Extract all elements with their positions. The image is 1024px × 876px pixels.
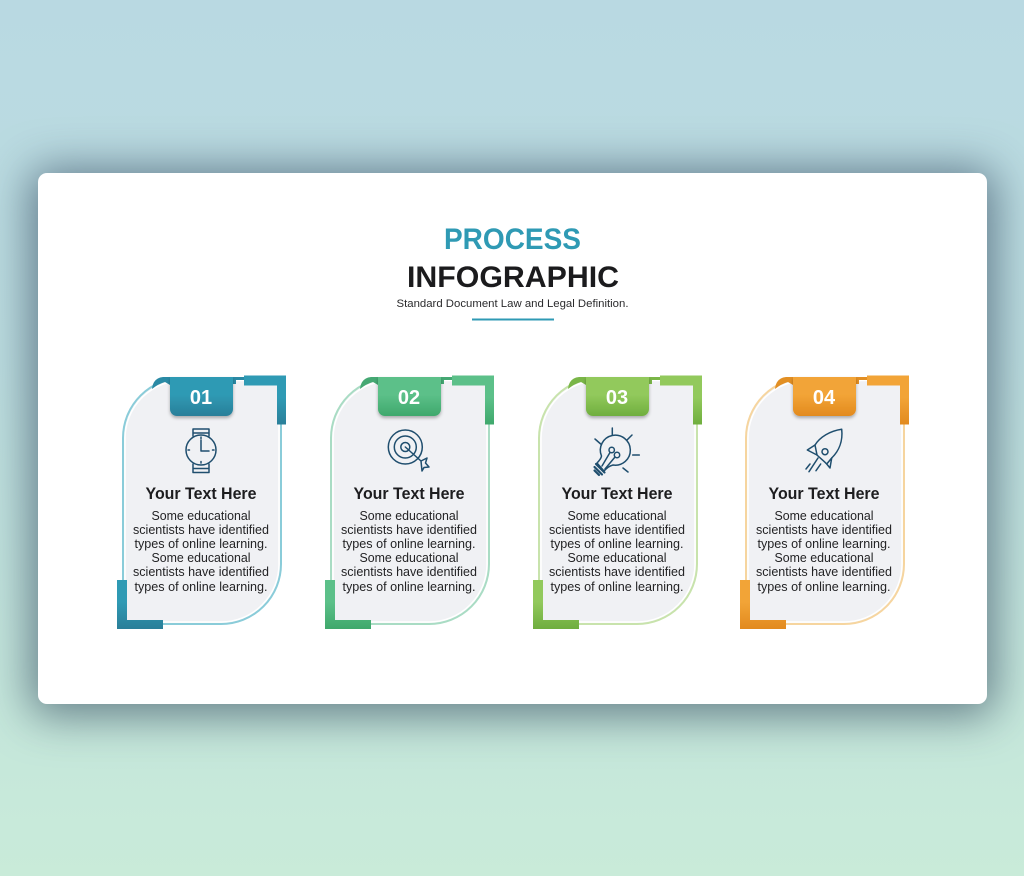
heading: Your Text Here (354, 484, 464, 503)
body text (549, 508, 685, 594)
heading: Your Text Here (146, 484, 256, 503)
body text: types of online learning. (342, 536, 476, 551)
corner: top right (867, 376, 909, 424)
panel: step 03 (533, 376, 702, 629)
inner white line (541, 380, 695, 622)
body text: types of online learning. (134, 536, 268, 551)
top ribbon strip (775, 377, 867, 389)
icon: target (388, 430, 429, 471)
tab: 03 (586, 377, 649, 416)
panel: step 02 (325, 376, 494, 629)
icon: light bulb (594, 428, 639, 475)
card body (746, 378, 904, 624)
panel: step 01 (117, 376, 286, 629)
tab: 01 (170, 377, 233, 416)
body text: Some educational (568, 550, 667, 565)
body text: scientists have identified (549, 522, 685, 537)
card body (123, 378, 281, 624)
icon: rocket (806, 429, 842, 472)
title block (396, 223, 628, 320)
tab: 04: 04 (813, 387, 836, 409)
top ribbon strip (360, 377, 452, 389)
inner white line (333, 380, 487, 622)
body text: Some educational (774, 550, 874, 565)
body text: types of online learning. (550, 579, 684, 594)
corner: top right (244, 376, 286, 424)
subtitle: Standard Document Law and Legal Definition. (396, 298, 628, 310)
body text: types of online learning. (758, 536, 890, 551)
body text: scientists have identified (756, 522, 892, 537)
top ribbon strip (152, 377, 244, 389)
corner: bottom left (117, 580, 163, 629)
heading: INFOGRAPHIC: INFOGRAPHIC (407, 261, 619, 294)
body text: types of online learning. (134, 579, 268, 594)
top ribbon strip (568, 377, 660, 389)
heading: Your Text Here (768, 484, 880, 503)
body text: scientists have identified (341, 522, 477, 537)
body text: scientists have identified (133, 564, 269, 579)
tab: 04 (793, 377, 856, 416)
body text (756, 508, 892, 594)
inner white line (748, 380, 902, 622)
body text: scientists have identified (549, 564, 685, 579)
body text: Some educational (152, 550, 251, 565)
body text: Some educational (360, 550, 459, 565)
icon: watch (186, 429, 216, 472)
body text: scientists have identified (133, 522, 269, 537)
body text: Some educational (152, 508, 251, 523)
heading: PROCESS: PROCESS (444, 223, 581, 256)
body text: types of online learning. (342, 579, 476, 594)
body text: scientists have identified (341, 564, 477, 579)
body text: types of online learning. (758, 579, 890, 594)
tab: 03: 03 (606, 387, 628, 409)
body text: scientists have identified (756, 564, 892, 579)
panel: white slide (38, 173, 987, 704)
card body (539, 378, 697, 624)
title underline (472, 318, 554, 320)
body text: Some educational (568, 508, 667, 523)
corner: bottom left (740, 580, 786, 629)
body text (133, 508, 269, 594)
card body (331, 378, 489, 624)
heading: Your Text Here (562, 484, 672, 503)
tab: 02 (378, 377, 441, 416)
corner: bottom left (533, 580, 579, 629)
tab: 01: 01 (190, 387, 212, 409)
corner: bottom left (325, 580, 371, 629)
tab: 02: 02 (398, 387, 420, 409)
body text (341, 508, 477, 594)
panel: step 04 (740, 376, 909, 629)
body text: types of online learning. (550, 536, 684, 551)
body text: Some educational (360, 508, 459, 523)
corner: top right (660, 376, 702, 424)
corner: top right (452, 376, 494, 424)
inner white line (125, 380, 279, 622)
body text: Some educational (774, 508, 874, 523)
